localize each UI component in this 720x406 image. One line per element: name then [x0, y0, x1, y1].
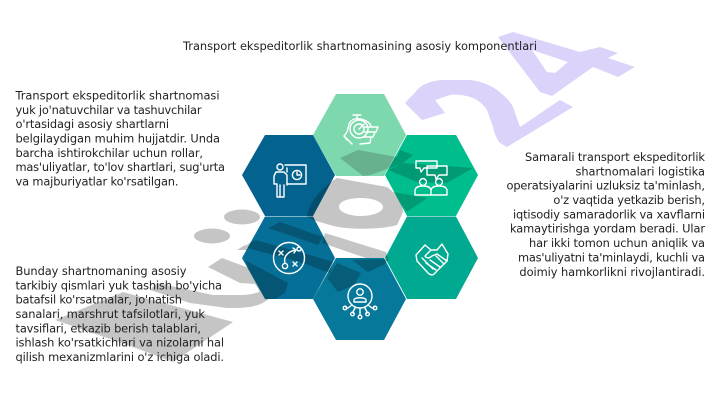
- text block: benefits: iqtisodiy samaradorlik va xavflarni: [513, 207, 705, 221]
- hexagon: upper left: [242, 135, 335, 216]
- text block: components: qilish mexanizmlarini o'z ichiga oladi.: [16, 350, 224, 364]
- icon: people with speech bubbles: [415, 161, 447, 195]
- icon: handshake: [416, 244, 448, 275]
- text block: benefits: mas'uliyatni ta'minlaydi, kuchli va: [518, 250, 705, 264]
- text block: definition: Transport ekspeditorlik shartnomasi: [14, 88, 220, 102]
- text block: definition: o'rtasidagi asosiy shartlarni: [16, 117, 169, 131]
- icon: strategy play circle: [274, 242, 304, 274]
- watermark: grey letters: [55, 150, 473, 362]
- text block: benefits: doimiy hamkorlikni rivojlantiradi.: [519, 265, 705, 279]
- watermark: dark band across top hexagons: [340, 150, 413, 176]
- text block: benefits: shartnomalari logistika: [576, 164, 705, 178]
- icon: person network: [343, 284, 377, 319]
- text block: benefits: Samarali transport ekspeditorlik: [525, 150, 705, 164]
- text block: definition: belgilaydigan muhim hujjatdir. Unda: [16, 132, 220, 146]
- hexagon: bottom: [313, 258, 406, 340]
- text block: components: tavsiflari, etkazib berish talablari,: [16, 321, 201, 335]
- text block: components: ishlash ko'rsatkichlari va nizolarni hal: [16, 336, 224, 350]
- text block: benefits: har ikki tomon uchun aniqlik va: [529, 236, 705, 250]
- text block: benefits: operatsiyalarini uzluksiz ta'minlash,: [506, 179, 705, 193]
- text block: components: [16, 264, 224, 364]
- text block: definition: yuk jo'natuvchilar va tashuvchilar: [16, 103, 202, 117]
- text block: benefits: o'z vaqtida yetkazib berish,: [553, 193, 705, 207]
- hexagon cluster: [242, 94, 478, 340]
- hexagon: top: [313, 94, 406, 176]
- text block: definition: barcha ishtirokchilar uchun rollar,: [16, 146, 203, 160]
- hexagon: lower left: [242, 216, 335, 299]
- text block: components: batafsil ko'rsatmalar, jo'natish: [16, 293, 182, 307]
- text block: definition: mas'uliyatlar, to'lov shartlari, sug'urta: [16, 160, 225, 174]
- text block: definition: va majburiyatlar ko'rsatilgan.: [16, 174, 178, 188]
- icon: head with target and gear: [344, 115, 378, 144]
- text block: benefits: [506, 150, 705, 279]
- watermark: lavender 24: [405, 32, 635, 147]
- text block: components: tarkibiy qismlari yuk tashish bo'yicha: [16, 278, 222, 292]
- icon: presenter with chart board: [274, 164, 306, 197]
- title: Transport ekspeditorlik shartnomasining asosiy komponentlari: [182, 39, 537, 53]
- text block: definition: [14, 88, 225, 188]
- text block: benefits: kamaytirishga yordam beradi. Ular: [510, 222, 705, 236]
- hexagon: lower right: [385, 216, 478, 299]
- hexagon: upper right: [385, 135, 478, 216]
- text block: components: sanalari, marshrut tafsilotlari, yuk: [16, 307, 205, 321]
- text block: components: Bunday shartnomaning asosiy: [16, 264, 187, 278]
